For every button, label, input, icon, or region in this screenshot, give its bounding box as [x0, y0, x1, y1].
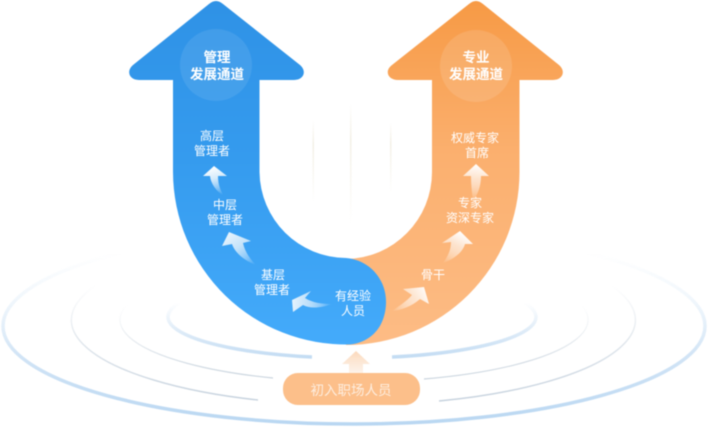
- label: authority experts: 首席: [465, 145, 489, 160]
- label: authority experts: 权威专家: [451, 131, 499, 145]
- heading circle: management: [180, 29, 252, 101]
- label: senior management: 管理者: [194, 143, 230, 158]
- arrow: to backbone: [392, 287, 429, 311]
- heading line: management track: 发展通道: [190, 66, 244, 82]
- ripple rings: [3, 228, 705, 424]
- arrow: entry upward: [342, 351, 370, 373]
- label: experts: 专家: [458, 196, 482, 210]
- arrow: to experts: [442, 231, 473, 263]
- arrow: to authority experts: [463, 164, 489, 201]
- heading: professional track: 专业: [462, 49, 490, 65]
- orange arrow: professional track: [346, 1, 563, 345]
- label: middle management: 中层: [213, 198, 237, 212]
- label: experienced staff: 有经验: [335, 289, 371, 303]
- label: backbone: 骨干: [421, 268, 445, 282]
- entry label: 初入职场人员: [310, 382, 392, 398]
- blue arrow: management track: [129, 1, 386, 345]
- arrow: to junior management: [292, 291, 332, 312]
- arrow: to senior management: [203, 166, 227, 196]
- heading: management track: 管理: [204, 49, 231, 65]
- label: junior management: 管理者: [254, 282, 290, 297]
- label: junior management: 基层: [261, 268, 285, 282]
- faint vertical lines: [312, 103, 392, 225]
- label: experts: 资深专家: [446, 210, 494, 225]
- arrow: to middle management: [222, 232, 256, 265]
- heading circle: professional: [440, 30, 512, 102]
- label: middle management: 管理者: [207, 212, 243, 227]
- entry pill: [283, 373, 420, 405]
- heading line: professional track: 发展通道: [449, 66, 503, 82]
- label: senior management: 高层: [200, 129, 224, 143]
- label: experienced staff: 人员: [341, 304, 365, 318]
